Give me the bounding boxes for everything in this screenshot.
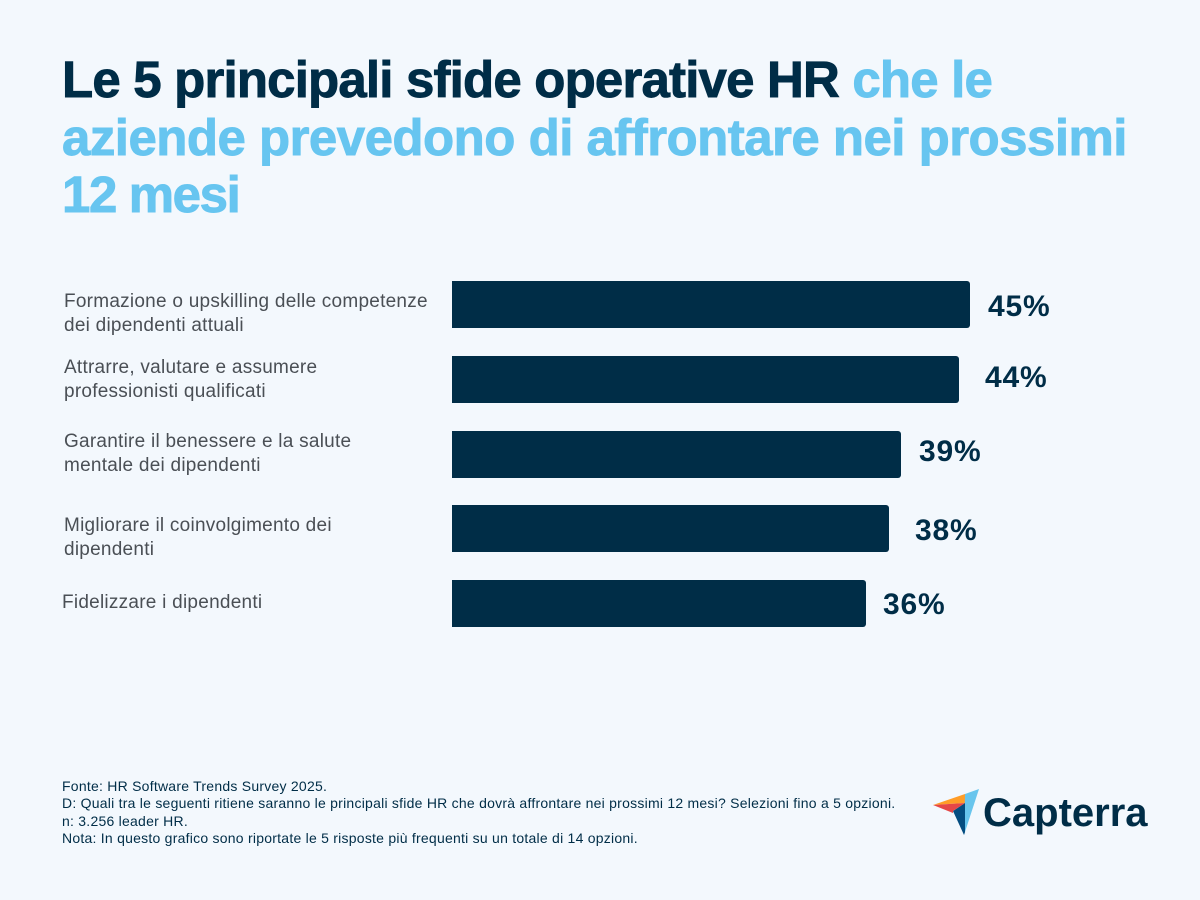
label: attrarre (64, 357, 317, 402)
bar: 38% (452, 505, 889, 552)
source notes: D: Quali tra le seguenti ritiene saranno le principali sfide HR che dovrà affrontare nei prossimi 12 mesi? Selezioni fino a 5 opzioni. (62, 795, 895, 811)
bar: 36% (452, 580, 866, 627)
label: benessere (64, 431, 351, 476)
label: attrarre: professionisti qualificati (64, 381, 266, 402)
value: 36%: 36% (883, 588, 945, 621)
title: 12 mesi (62, 166, 239, 223)
wordmark: Capterra (983, 791, 1148, 835)
source notes: Nota: In questo grafico sono riportate le 5 risposte più frequenti su un totale di 14 opzioni. (62, 830, 638, 846)
label: formazione (64, 291, 428, 336)
label: attrarre: Attrarre, valutare e assumere (64, 357, 317, 378)
bar: 44% (452, 356, 959, 403)
value: 44%: 44% (985, 361, 1047, 394)
value: 38%: 38% (915, 514, 977, 547)
icon: Capterra arrow (933, 789, 979, 835)
bar: 39% (452, 431, 901, 478)
label: benessere: Garantire il benessere e la salute (64, 431, 351, 452)
source notes: Fonte: HR Software Trends Survey 2025. (62, 778, 327, 794)
label: coinvolgimento: dipendenti (64, 539, 154, 560)
value: 39%: 39% (919, 435, 981, 468)
label: fidelizzare: Fidelizzare i dipendenti (62, 592, 262, 613)
source notes: n: 3.256 leader HR. (62, 813, 188, 829)
value: 45%: 45% (988, 290, 1050, 323)
bar: 45% (452, 281, 970, 328)
logo: Capterra (933, 789, 1148, 835)
source notes (62, 778, 895, 846)
label: coinvolgimento (64, 515, 332, 560)
label: coinvolgimento: Migliorare il coinvolgimento dei (64, 515, 332, 536)
title: aziende prevedono di affrontare nei prossimi (62, 109, 1127, 166)
label: formazione: Formazione o upskilling delle competenze (64, 291, 428, 312)
title: Le 5 principali sfide operative HR che le (62, 51, 992, 108)
bar chart (62, 281, 1050, 627)
label: formazione: dei dipendenti attuali (64, 315, 244, 336)
label: benessere: mentale dei dipendenti (64, 455, 261, 476)
title (62, 51, 1127, 223)
